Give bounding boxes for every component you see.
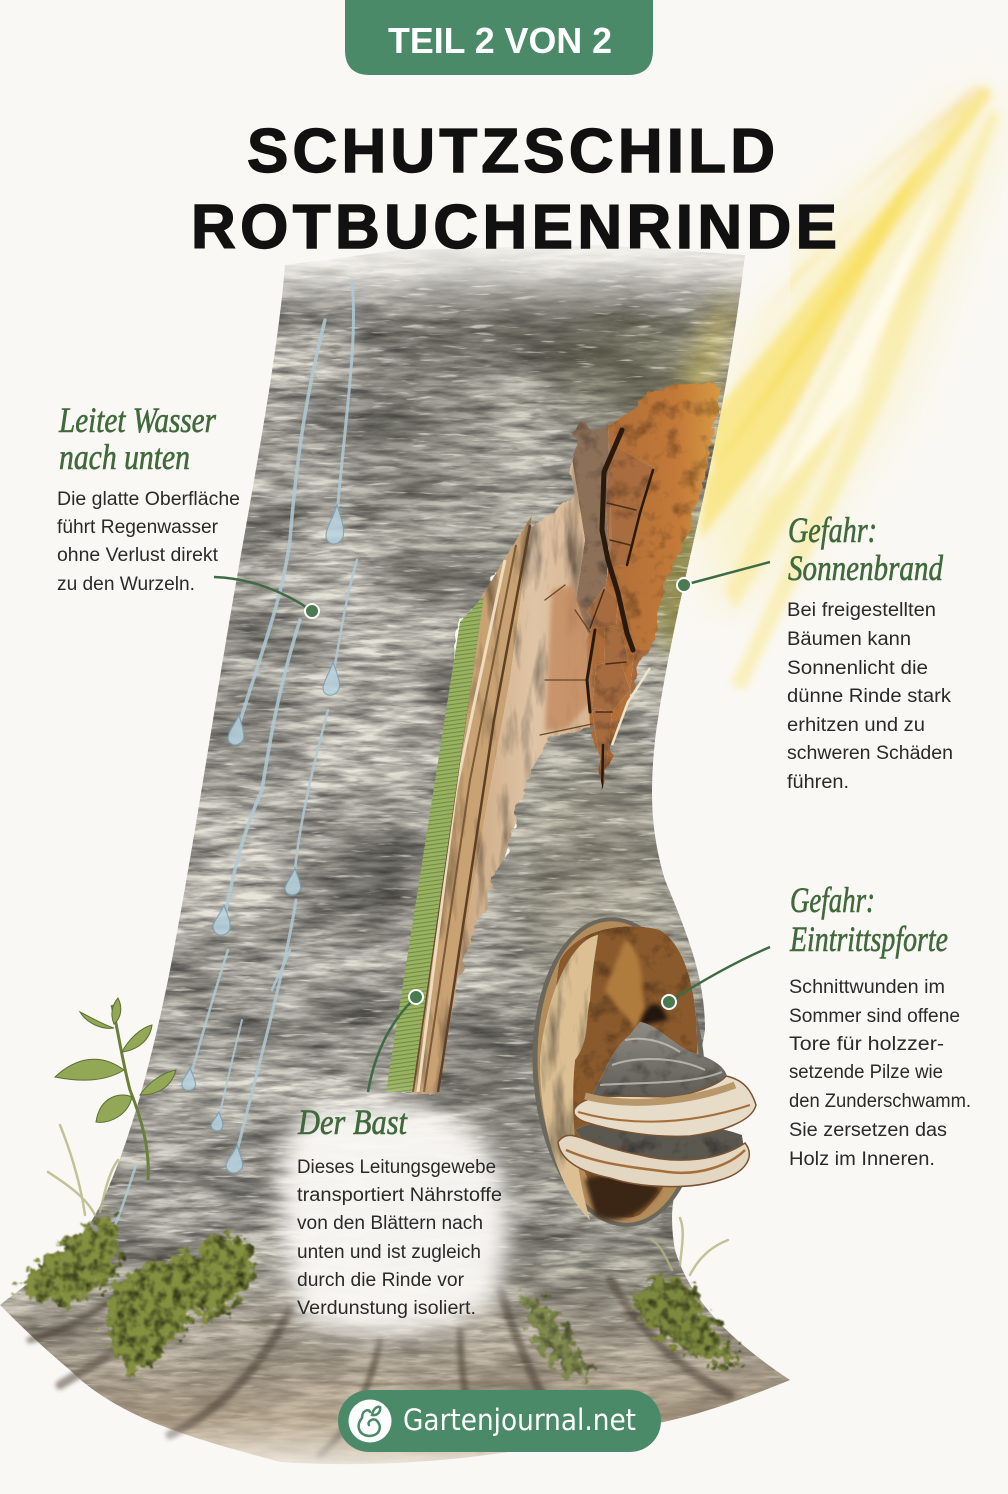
body text: Sie zersetzen das bbox=[789, 1120, 947, 1141]
tree trunk bark bbox=[0, 246, 790, 1464]
callout: water bbox=[57, 400, 319, 618]
cavity rim bbox=[522, 911, 716, 1233]
header badge bbox=[345, 0, 653, 75]
callout: sunburn bbox=[677, 510, 953, 793]
strip lines bbox=[413, 525, 530, 1092]
logo icon bbox=[348, 1400, 392, 1442]
body text: führt Regenwasser bbox=[57, 517, 219, 538]
body text: Holz im Inneren. bbox=[789, 1149, 935, 1170]
dome ridges bbox=[600, 1039, 722, 1085]
body text: setzende Pilze wie bbox=[789, 1062, 943, 1083]
heading bbox=[789, 880, 948, 959]
heading bbox=[58, 400, 217, 477]
dark cracks bbox=[540, 430, 653, 795]
orange plates on wood bbox=[545, 585, 592, 730]
title bbox=[191, 117, 837, 262]
leader line bbox=[677, 562, 770, 592]
sapling leaves bbox=[55, 998, 176, 1122]
body text: erhitzen und zu bbox=[787, 715, 925, 736]
water drops bbox=[182, 505, 344, 1173]
heading: Der Bast bbox=[297, 1102, 408, 1142]
heading: Leitet Wasser bbox=[58, 400, 217, 440]
heading: Gefahr: bbox=[788, 510, 877, 550]
beige wood bbox=[430, 462, 660, 1094]
halo behind Der Bast text bbox=[281, 1103, 510, 1335]
title: SCHUTZSCHILD bbox=[247, 117, 775, 186]
body text bbox=[297, 1157, 502, 1319]
dark hollow bbox=[638, 1004, 668, 1030]
body text: Verdunstung isoliert. bbox=[297, 1298, 476, 1319]
fungus lower shelf bbox=[558, 1135, 749, 1187]
footer brand pill: Gartenjournal.net bbox=[403, 1403, 636, 1437]
cavity interior bbox=[556, 926, 697, 1218]
body text: dünne Rinde stark bbox=[787, 686, 952, 707]
bark base texture bbox=[0, 246, 790, 1462]
body text: Schnittwunden im bbox=[789, 977, 945, 998]
dusky inner column bbox=[570, 422, 610, 634]
heading bbox=[788, 510, 944, 588]
roots and ground bbox=[0, 1125, 1008, 1480]
body text: Sonnenlicht die bbox=[787, 658, 928, 679]
fungus lower cap bbox=[575, 1119, 745, 1165]
brown plates bbox=[586, 372, 728, 786]
moss left bbox=[18, 1215, 255, 1375]
body text: Bäumen kann bbox=[787, 629, 911, 650]
pale wood lining bbox=[540, 935, 598, 1220]
moss right bbox=[632, 1277, 740, 1365]
body text: Die glatte Oberfläche bbox=[57, 489, 240, 510]
footer brand pill bbox=[338, 1390, 661, 1452]
body text bbox=[57, 489, 240, 595]
heading: nach unten bbox=[59, 437, 190, 477]
fungus upper dome bbox=[590, 1022, 727, 1105]
bast and wood strips bbox=[386, 515, 532, 1094]
lower plates bbox=[587, 587, 650, 782]
body text: Sommer sind offene bbox=[789, 1006, 960, 1027]
callout: entry wound bbox=[662, 880, 971, 1170]
bark shading bbox=[370, 275, 720, 1300]
title: ROTBUCHENRINDE bbox=[191, 193, 837, 262]
orange decay patch bbox=[605, 940, 645, 1030]
heading: Sonnenbrand bbox=[788, 548, 944, 588]
heading: Gefahr: bbox=[790, 880, 875, 920]
bark streaks bbox=[5, 256, 786, 1440]
top fade of trunk bbox=[230, 235, 790, 320]
header badge: TEIL 2 VON 2 bbox=[388, 20, 612, 61]
central plate darker bbox=[606, 443, 654, 567]
body text bbox=[789, 977, 971, 1170]
tan strips bbox=[412, 515, 532, 1094]
fungus upper shelf bbox=[574, 1076, 756, 1136]
cavity with bracket fungus bbox=[522, 911, 756, 1233]
leader line bbox=[368, 990, 423, 1092]
sun rays bbox=[695, 85, 1000, 690]
body text: von den Blättern nach bbox=[297, 1213, 483, 1234]
root cracks bbox=[30, 1240, 730, 1455]
body text: durch die Rinde vor bbox=[297, 1270, 465, 1291]
yellow light on bark bbox=[671, 290, 740, 404]
body text: unten und ist zugleich bbox=[297, 1242, 481, 1263]
heading: Eintrittspforte bbox=[789, 919, 948, 959]
body text: transportiert Nährstoffe bbox=[297, 1185, 502, 1206]
body text bbox=[787, 600, 953, 793]
body text: Dieses Leitungsgewebe bbox=[297, 1157, 496, 1178]
root colouring bbox=[0, 1258, 790, 1464]
lower shelf band bbox=[566, 1150, 745, 1173]
body text: schweren Schäden bbox=[787, 743, 953, 764]
bast: green layer bbox=[386, 596, 484, 1092]
body text: zu den Wurzeln. bbox=[57, 574, 195, 595]
body text: ohne Verlust direkt bbox=[57, 545, 219, 566]
bottom fade bbox=[0, 1420, 1008, 1480]
water running down the bark bbox=[112, 282, 357, 1232]
sapling bbox=[55, 998, 176, 1180]
leader line bbox=[662, 947, 770, 1009]
body text: Tore für holzzer- bbox=[789, 1034, 944, 1055]
torn bark edges bbox=[612, 668, 650, 745]
upper shelf bands bbox=[578, 1085, 750, 1122]
exposed wood under the bark bbox=[430, 370, 740, 1100]
body text: Bei freigestellten bbox=[787, 600, 936, 621]
grass bbox=[48, 1125, 728, 1275]
ray streaks bbox=[700, 85, 1000, 690]
callout: bast bbox=[297, 990, 502, 1319]
moss centre bbox=[522, 1290, 590, 1380]
leader line bbox=[214, 577, 319, 618]
body text: den Zunderschwamm. bbox=[789, 1091, 971, 1112]
body text: führen. bbox=[787, 772, 849, 793]
